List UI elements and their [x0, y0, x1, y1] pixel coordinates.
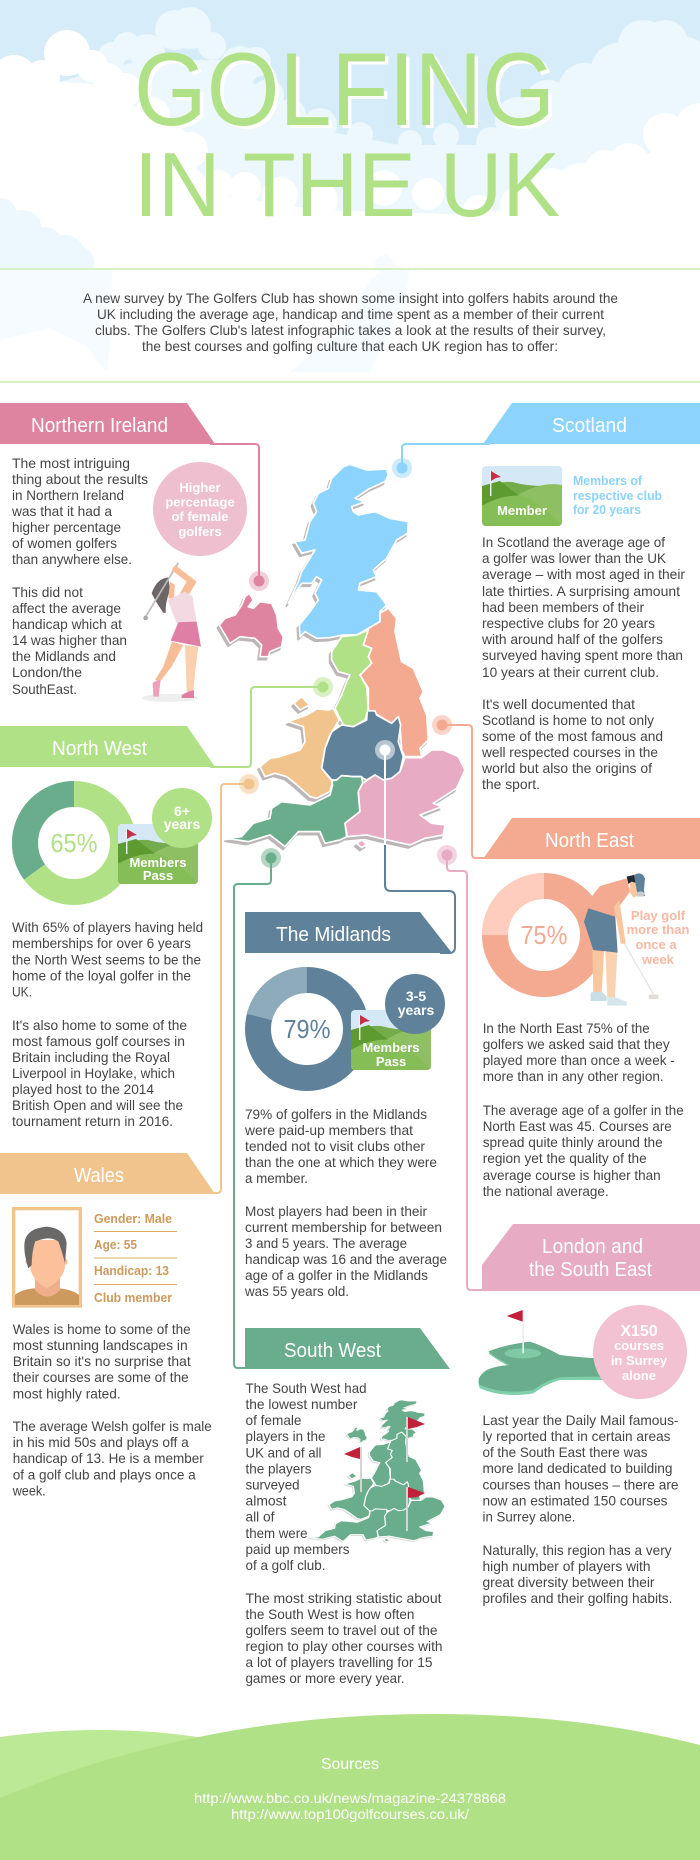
members pass: 3-5 years: Members	[362, 1040, 420, 1055]
panel: London and the South East	[437, 845, 700, 1606]
sky header background	[0, 0, 700, 383]
text: The Midlands: a member.	[245, 1170, 308, 1186]
text: South West: golfers seem to travel out of the	[246, 1622, 438, 1638]
profile list	[94, 1212, 177, 1305]
text: Scotland: the sport.	[482, 776, 540, 792]
text: Scotland: a golfer was lower than the UK	[482, 550, 667, 566]
intro text: clubs. The Golfers Club's latest infographic takes a look at the results of their survey,	[95, 322, 606, 338]
text: Wales: their courses are some of the	[13, 1369, 189, 1385]
stat bubble: X150 courses: X150	[620, 1323, 658, 1340]
text: North West: Liverpool in Hoylake, which	[12, 1065, 175, 1081]
heading: South West: South West	[284, 1340, 381, 1362]
text: London and the South East: more land dedicated to building	[482, 1460, 672, 1476]
text: Wales	[12, 1321, 212, 1498]
panel: Wales	[0, 774, 259, 1498]
text: South West: all of	[246, 1508, 275, 1524]
connector: Northern Ireland	[210, 444, 269, 591]
text: London and the South East: in Surrey alone.	[482, 1508, 576, 1524]
heading: Scotland: Scotland	[552, 415, 627, 437]
text: The Midlands: handicap was 16 and the average	[245, 1251, 447, 1267]
text: South West: the players	[246, 1460, 312, 1476]
icon: female golfer	[142, 563, 201, 702]
callout: play golf	[627, 908, 689, 967]
text: London and the South East: courses than houses – there are	[482, 1476, 679, 1492]
text: North East: golfers we asked said that they	[483, 1036, 670, 1052]
title: GOLFING	[138, 35, 558, 151]
panel: North West	[0, 677, 333, 1129]
intro text: A new survey by The Golfers Club has shown some insight into golfers habits around the	[83, 290, 618, 306]
text: Wales: week.	[12, 1482, 46, 1498]
panel: Scotland	[392, 403, 700, 792]
connector: London	[437, 845, 490, 1290]
text: Wales: most highly rated.	[13, 1386, 121, 1402]
text: Northern Ireland: than anywhere else.	[12, 551, 132, 567]
text: South West: a lot of players travelling for 15	[246, 1654, 433, 1670]
text: Wales: Britain so it's no surprise that	[13, 1353, 191, 1369]
donut chart: 75%: 75%	[520, 920, 568, 950]
text: Northern Ireland: 14 was higher than	[12, 632, 127, 648]
text: North East: average course is higher than	[483, 1167, 661, 1183]
text: Northern Ireland: of women golfers	[12, 535, 117, 551]
text: North West: UK.	[12, 984, 32, 1000]
donut chart: 65%	[25, 794, 123, 892]
callout: 20 years: respective club	[573, 488, 662, 503]
text: London and the South East: Last year the Daily Mail famous-	[482, 1412, 679, 1428]
text: South West: games or more every year.	[246, 1670, 404, 1686]
text: The Midlands	[244, 1106, 447, 1299]
text: London and the South East: profiles and their golfing habits.	[482, 1590, 672, 1606]
stat bubble: female golfers: Higher	[179, 480, 221, 495]
text: London and the South East: great diversity between their	[482, 1574, 655, 1590]
sources: Sources	[321, 1756, 379, 1773]
text: North East: spread quite thinly around the	[483, 1134, 663, 1150]
text: Wales: most stunning landscapes in	[13, 1337, 188, 1353]
text: Scotland: with around half of the golfers	[481, 631, 663, 647]
members pass: 3-5 years: 3-5	[406, 988, 426, 1004]
title	[134, 32, 560, 236]
member card	[482, 466, 562, 526]
icon: putting green with flag	[478, 1310, 607, 1395]
text: South West: UK and of all	[246, 1444, 322, 1460]
sources: http://www.top100golfcourses.co.uk/	[231, 1806, 469, 1822]
portrait: average Welsh golfer	[14, 1209, 80, 1306]
members pass: 3-5 years: years	[398, 1002, 435, 1018]
text: Scotland: average – with most aged in their	[482, 566, 685, 582]
donut chart: 79%: 79%	[284, 1014, 330, 1044]
text: North East: In the North East 75% of the	[483, 1020, 650, 1036]
text: The Midlands: than the one at which they were	[245, 1154, 437, 1170]
text: North East: the national average.	[483, 1183, 609, 1199]
text: Scotland: world but also the origins of	[481, 760, 652, 776]
text: The Midlands: were paid-up members that	[244, 1122, 413, 1138]
text: North West: memberships for over 6 years	[12, 935, 191, 951]
text: North West: British Open and will see the	[12, 1097, 183, 1113]
text: Northern Ireland	[11, 455, 148, 697]
text: South West: them were	[246, 1525, 308, 1541]
text: South West: paid up members	[246, 1541, 350, 1557]
text: Wales: in his mid 50s and plays off a	[13, 1434, 189, 1450]
text: Scotland: In Scotland the average age of	[482, 534, 665, 550]
heading: London and the South East: London and	[542, 1236, 643, 1258]
heading: Wales: Wales	[74, 1165, 124, 1187]
text: North West: With 65% of players having held	[12, 919, 203, 935]
heading: North West	[0, 726, 215, 767]
sources	[194, 1756, 506, 1822]
text: North West: most famous golf courses in	[12, 1033, 185, 1049]
text: Northern Ireland: SouthEast.	[12, 681, 77, 697]
members pass: 3-5 years: Pass	[376, 1054, 406, 1069]
text: The Midlands: was 55 years old.	[244, 1283, 349, 1299]
text: Wales: Wales is home to some of the	[13, 1321, 191, 1337]
icon: male golfer	[584, 873, 659, 1006]
text: Northern Ireland: was that it had a	[11, 503, 112, 519]
text: South West: surveyed	[246, 1476, 300, 1492]
callout: play golf: Play golf	[631, 908, 686, 923]
intro text: UK including the average age, handicap and time spent as a member of their current	[97, 306, 604, 322]
text: South West: the South West is how often	[246, 1606, 414, 1622]
text: North West: the North West seems to be the	[12, 952, 201, 968]
text: North East	[483, 1020, 684, 1199]
footer hills	[0, 1714, 700, 1860]
stat bubble: female golfers	[153, 462, 247, 556]
title: IN THE UK	[134, 135, 560, 236]
text: Northern Ireland: affect the average	[12, 600, 121, 616]
callout: 20 years	[573, 473, 662, 517]
stat bubble: female golfers: percentage	[165, 494, 235, 510]
text: Northern Ireland: thing about the results	[12, 471, 148, 487]
connector: North West	[210, 677, 333, 767]
text: Northern Ireland: The most intriguing	[12, 455, 130, 471]
text: North West	[12, 919, 203, 1129]
text: North East: played more than once a week -	[483, 1052, 675, 1068]
heading: The Midlands: The Midlands	[276, 924, 391, 946]
panel: South West	[234, 848, 450, 1686]
heading: Wales	[0, 1153, 215, 1194]
panel: The Midlands	[244, 740, 455, 1299]
text: The Midlands: current membership for between	[245, 1219, 442, 1235]
donut chart: 79%	[258, 980, 356, 1078]
text: Scotland	[481, 534, 685, 792]
callout: play golf: week	[641, 952, 675, 967]
text: Wales: handicap of 13. He is a member	[13, 1450, 204, 1466]
text: South West: region to play other courses with	[246, 1638, 442, 1654]
text: Northern Ireland: in Northern Ireland	[12, 487, 124, 503]
members pass: 6+ years: Pass	[143, 868, 173, 883]
text: London and the South East	[482, 1412, 679, 1606]
text: London and the South East: of the South East there was	[482, 1444, 648, 1460]
text: South West: The South West had	[246, 1380, 366, 1396]
text: Scotland: late thirties. A surprising amount	[482, 583, 680, 599]
intro text: the best courses and golfing culture that each UK region has to offer:	[142, 338, 558, 354]
members pass: 6+ years	[118, 788, 212, 884]
callout: 20 years: for 20 years	[573, 502, 641, 517]
callout: play golf: once a	[635, 937, 677, 952]
heading: South West	[245, 1328, 450, 1369]
stat bubble: X150 courses: alone	[622, 1368, 656, 1383]
connector: Scotland	[392, 444, 490, 478]
text: South West: the lowest number	[246, 1396, 358, 1412]
text: London and the South East: now an estimated 150 courses	[482, 1492, 668, 1508]
connector: Wales	[210, 774, 259, 1193]
text: Scotland: had been members of their	[482, 599, 644, 615]
text: Scotland: Scotland is home to not only	[482, 712, 654, 728]
intro text	[83, 290, 618, 354]
text: North East: The average age of a golfer in the	[483, 1102, 684, 1118]
heading: North West: North West	[52, 738, 147, 760]
members pass: 6+ years: years	[164, 816, 201, 832]
text: The Midlands: age of a golfer in the Midlands	[245, 1267, 428, 1283]
text: South West	[246, 1380, 442, 1686]
text: North East: region yet the quality of the	[483, 1150, 647, 1166]
heading: Northern Ireland	[0, 403, 215, 444]
text: The Midlands: 79% of golfers in the Midlands	[245, 1106, 427, 1122]
text: North West: Britain including the Royal	[12, 1049, 170, 1065]
text: Wales: of a golf club and plays once a	[13, 1466, 196, 1482]
text: The Midlands: Most players had been in their	[245, 1203, 427, 1219]
text: South West: almost	[246, 1492, 287, 1508]
text: Scotland: some of the most famous and	[482, 728, 663, 744]
text: Northern Ireland: the Midlands and	[12, 648, 116, 664]
UK map	[219, 464, 465, 848]
text: South West: of female	[246, 1412, 302, 1428]
text: Scotland: respective clubs for 20 years	[482, 615, 655, 631]
stat bubble: X150 courses	[593, 1305, 687, 1399]
stat bubble: female golfers: of female	[171, 509, 229, 524]
heading: London and the South East: the South East	[529, 1259, 652, 1281]
text: North East: more than in any other region.	[483, 1068, 664, 1084]
donut chart: 65%: 65%	[50, 828, 98, 858]
stat bubble: X150 courses: courses	[614, 1338, 664, 1353]
connector: The Midlands	[375, 740, 455, 953]
text: London and the South East: ly reported that in certain areas	[482, 1428, 670, 1444]
members pass: 6+ years: 6+	[174, 803, 190, 819]
heading: The Midlands	[245, 912, 452, 953]
text: The Midlands: tended not to visit clubs other	[245, 1138, 425, 1154]
member card: Member	[497, 503, 547, 518]
text: The Midlands: 3 and 5 years. The average	[245, 1235, 407, 1251]
members pass: 6+ years: Members	[129, 855, 187, 870]
text: Northern Ireland: higher percentage	[12, 519, 121, 535]
text: South West: of a golf club.	[246, 1557, 326, 1573]
callout: play golf: more than	[627, 922, 689, 937]
text: Scotland: It's well documented that	[482, 696, 635, 712]
donut chart: 75%	[495, 886, 593, 984]
profile list: Age: 55	[94, 1238, 137, 1252]
heading: Scotland	[483, 403, 700, 444]
callout: 20 years: Members of	[573, 473, 643, 488]
title: GOLFING	[134, 32, 555, 148]
text: Wales: The average Welsh golfer is male	[13, 1418, 212, 1434]
text: Scotland: 10 years at their current club.	[482, 664, 659, 680]
connector: North East	[432, 715, 492, 858]
icon: mini UK map with flags	[310, 1400, 445, 1542]
heading: North East: North East	[545, 830, 634, 852]
text: London and the South East: Naturally, this region has a very	[482, 1542, 672, 1558]
text: North East: North East was 45. Courses are	[483, 1118, 672, 1134]
profile list: Gender: Male	[94, 1212, 172, 1226]
panel: Northern Ireland	[0, 403, 269, 702]
text: Scotland: surveyed having spent more than	[482, 647, 683, 663]
text: North West: tournament return in 2016.	[12, 1113, 173, 1129]
members pass: 3-5 years	[351, 974, 445, 1070]
connector: South West	[234, 848, 281, 1368]
text: Northern Ireland: This did not	[12, 584, 83, 600]
heading: London and the South East	[482, 1224, 700, 1291]
sources: http://www.bbc.co.uk/news/magazine-24378868	[194, 1790, 506, 1806]
text: North West: home of the loyal golfer in the	[12, 968, 191, 984]
text: South West: players in the	[246, 1428, 326, 1444]
profile list: Handicap: 13	[94, 1264, 169, 1278]
text: Northern Ireland: London/the	[12, 664, 82, 680]
text: Northern Ireland: handicap which at	[12, 616, 122, 632]
heading: North East	[483, 818, 700, 859]
text: London and the South East: high number of players with	[482, 1558, 650, 1574]
heading: Northern Ireland: Northern Ireland	[31, 415, 168, 437]
profile list: Club member	[94, 1291, 172, 1305]
text: Scotland: well respected courses in the	[481, 744, 658, 760]
panel: North East	[432, 715, 700, 1199]
text: North West: It's also home to some of the	[12, 1017, 187, 1033]
text: South West: The most striking statistic about	[246, 1590, 442, 1606]
text: North West: played host to the 2014	[12, 1081, 154, 1097]
stat bubble: X150 courses: in Surrey	[611, 1353, 668, 1368]
stat bubble: female golfers: golfers	[178, 524, 222, 539]
